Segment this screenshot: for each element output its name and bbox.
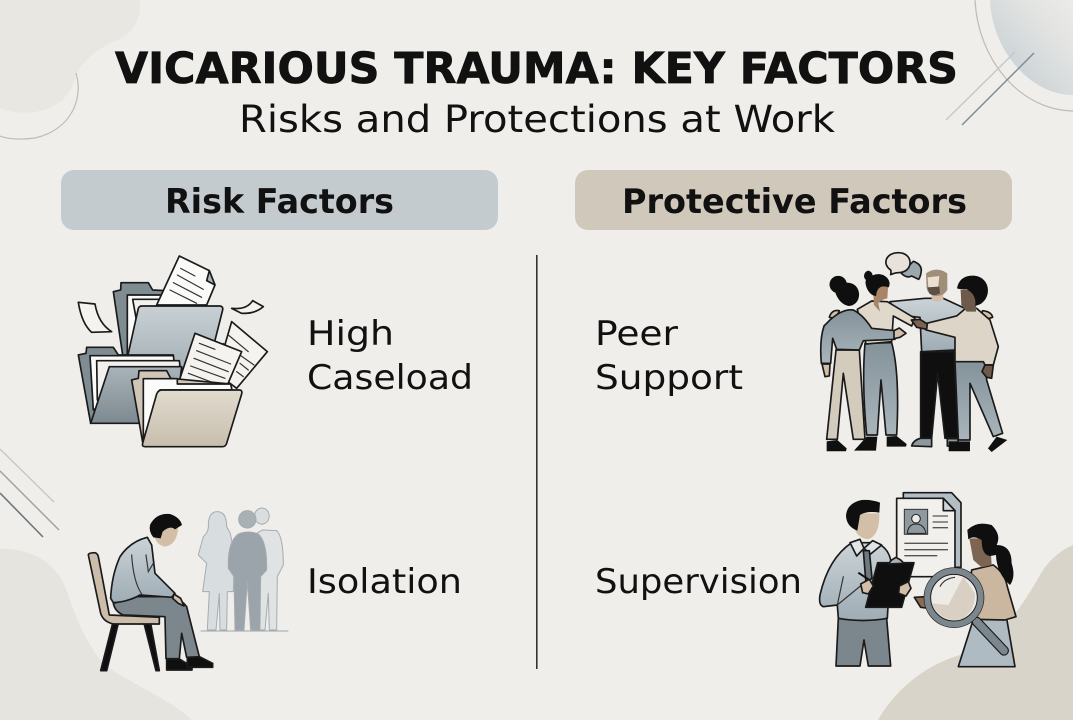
subtitle: Risks and Protections at Work [239, 98, 836, 141]
label: support: Support [595, 358, 743, 398]
document stack [897, 493, 961, 577]
supervisor with clipboard [820, 500, 914, 666]
speech bubbles [886, 253, 921, 279]
decoration: top-left blob and ring [0, 0, 140, 139]
decoration: bottom-right blob [878, 545, 1073, 720]
title: VICARIOUS TRAUMA: KEY FACTORS [115, 44, 958, 94]
seated man [111, 514, 213, 670]
icon: supervisor reviewing documents with magnifier [820, 493, 1016, 667]
label: peer: Peer [595, 314, 678, 354]
decoration: top-right circle and lines [946, 0, 1073, 125]
magnifying glass [924, 567, 1004, 651]
centre divider [536, 255, 538, 669]
icon: overflowing folders [78, 256, 267, 447]
silhouette group in the background [198, 508, 288, 631]
panel heading: risk factors [61, 170, 498, 230]
panel heading: risk factors: Risk Factors [165, 182, 394, 222]
label: high caseload: High [307, 314, 394, 354]
icon: isolated man on chair with distant group [88, 508, 288, 671]
person: woman in blue pants [829, 271, 915, 451]
label: isolation: Isolation [307, 562, 462, 602]
person: man with beard [890, 270, 993, 447]
icon: group of colleagues supporting each other [821, 253, 1007, 452]
person: man in sweater [911, 276, 1007, 452]
panel heading: protective factors [575, 170, 1012, 230]
decoration: bottom-left blob and lines [0, 449, 192, 720]
person: woman in tan pants [821, 276, 906, 451]
woman with ponytail [914, 524, 1016, 667]
label: high caseload second line: Caseload [307, 358, 473, 398]
label: supervision: Supervision [595, 562, 802, 602]
chair [88, 553, 159, 671]
panel heading: protective factors: Protective Factors [622, 182, 967, 222]
